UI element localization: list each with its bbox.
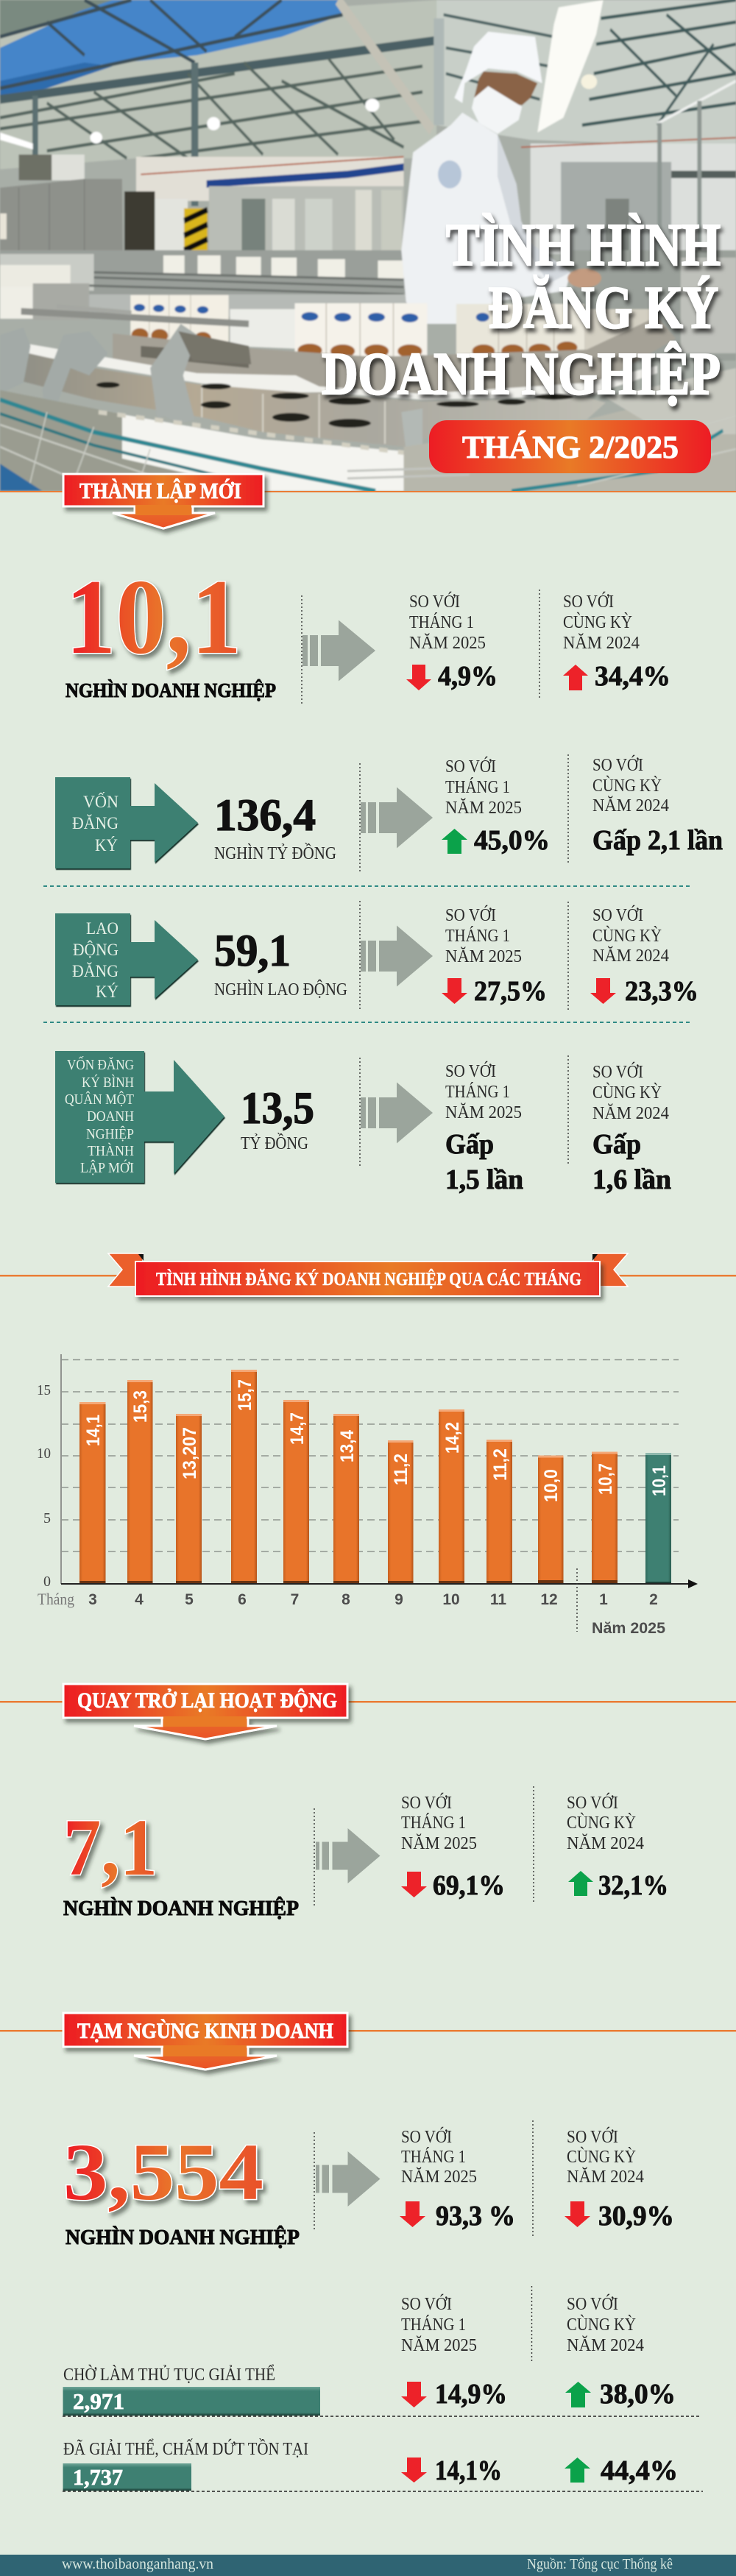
arrow: grey [361,1082,433,1144]
key figure: 3,554 [63,2127,300,2249]
bar chart: monthly new enterprises: 15 [37,1382,51,1398]
row: vốn đăng ký bình quân [55,1051,314,1183]
row: vốn đăng ký: KÝ [95,836,118,854]
bar value labels: 10,0 [541,1469,562,1502]
comparison: tháng 1: 27,5% [474,976,547,1007]
comparison: cùng kỳ: SO VỚI [592,905,643,925]
key figure: 3,554: NGHÌN DOANH NGHIỆP [66,2225,300,2249]
row: đã giải thể, chấm dứt tồn tại: 14,1% [435,2455,502,2486]
bar chart: monthly new enterprises: 10 [37,1446,51,1462]
comparison: tháng 1 năm 2025: THÁNG 1 [409,613,474,632]
comparison: tháng 1: 1,5 lần [445,1164,523,1195]
bar value labels: 11,2 [391,1454,411,1485]
key figure: 10,1: NGHÌN DOANH NGHIỆP [66,679,276,701]
comparison: cùng kỳ: NĂM 2024 [592,946,669,966]
bar value labels: 15,3 [130,1390,151,1423]
comparison: tháng 1 [442,905,547,1007]
comparison: cùng kỳ: SO VỚI [567,2127,618,2147]
comparison header: cùng kỳ: CÙNG KỲ [567,2315,636,2335]
comparison header: tháng 1 [401,2294,477,2355]
comparison: cùng kỳ: CÙNG KỲ [592,1083,662,1103]
comparison: cùng kỳ [592,1062,671,1195]
month labels: 2 [649,1591,658,1608]
comparison: tháng 1 năm 2025: NĂM 2025 [409,634,486,653]
row: lao động đăng ký: LAO [86,919,118,938]
key figure: 7,1: NGHÌN DOANH NGHIỆP [63,1896,299,1920]
row: chờ làm thủ tục giải thể: 14,9% [435,2379,507,2410]
bar value labels: 13,4 [337,1430,358,1462]
hero photo: factory worker and milk production line [0,0,736,500]
row: vốn đăng ký bình quân: THÀNH [88,1142,134,1159]
comparison: tháng 1: THÁNG 1 [445,927,510,946]
comparison: cùng kỳ: Gấp [592,1129,641,1160]
arrow: grey [361,926,433,986]
footer [0,2555,736,2576]
row: vốn đăng ký bình quân: KÝ BÌNH [82,1074,134,1091]
row: vốn đăng ký: ĐĂNG [72,814,118,832]
comparison header: cùng kỳ [567,2294,644,2355]
arrow: grey [316,1828,380,1883]
comparison: cùng kỳ: CÙNG KỲ [592,776,662,796]
month labels: 10 [442,1591,460,1608]
row: lao động đăng ký [55,913,347,1005]
ribbon heading: monthly chart: TÌNH HÌNH ĐĂNG KÝ DOANH NGHIỆP QUA CÁC THÁNG [156,1269,581,1289]
comparison: tháng 1 năm 2025: 4,9% [438,661,498,692]
comparison: tháng 1: THÁNG 1 [401,1814,466,1833]
comparison: tháng 1: NĂM 2025 [401,2168,477,2187]
key figure: 10,1: 10,1 [66,557,241,676]
comparison: cùng kỳ: NĂM 2024 [567,2168,644,2187]
row: vốn đăng ký [55,777,336,868]
row: vốn đăng ký: 136,4 [214,791,316,841]
row: lao động đăng ký: 59,1 [214,927,291,976]
comparison: cùng kỳ năm 2024 [563,592,670,692]
comparison: cùng kỳ năm 2024: SO VỚI [563,592,614,612]
row: lao động đăng ký: ĐỘNG [73,940,118,959]
comparison header: tháng 1: NĂM 2025 [401,2336,477,2355]
comparison: cùng kỳ: 30,9% [598,2201,674,2232]
comparison: cùng kỳ [590,905,698,1007]
comparison: cùng kỳ: NĂM 2024 [567,1834,644,1853]
comparison: tháng 1: 45,0% [474,825,550,856]
section badge: thành lập mới [63,474,263,528]
row: đã giải thể, chấm dứt tồn tại: 44,4% [601,2455,678,2486]
key figure: 7,1 [63,1802,299,1920]
comparison: tháng 1 [400,2127,515,2232]
date pill [429,420,711,473]
bar value labels: 15,7 [235,1379,255,1411]
comparison: tháng 1: SO VỚI [445,905,496,925]
hero bottom orange rule [0,491,736,492]
bar chart: monthly new enterprises: 0 [43,1574,51,1590]
bar value labels: 11,2 [490,1448,511,1481]
bar chart: monthly new enterprises: 5 [43,1510,51,1526]
comparison: tháng 1: 93,3 % [436,2201,515,2232]
month labels: 8 [342,1591,350,1608]
comparison: cùng kỳ: NĂM 2024 [592,1104,669,1123]
row: chờ làm thủ tục giải thể: 2,971 [73,2388,124,2414]
comparison: cùng kỳ năm 2024: 34,4% [595,661,670,692]
comparison: tháng 1: THÁNG 1 [445,1083,510,1102]
row: vốn đăng ký bình quân: 13,5 [241,1084,314,1133]
comparison: cùng kỳ: 32,1% [598,1870,668,1901]
arrow: grey [302,620,375,682]
row: đã giải thể, chấm dứt tồn tại: ĐÃ GIẢI THỂ, CHẤM DỨT TỒN TẠI [63,2439,308,2459]
row: vốn đăng ký: NGHÌN TỶ ĐỒNG [214,843,336,863]
comparison: tháng 1: THÁNG 1 [401,2148,466,2167]
row: vốn đăng ký bình quân: TỶ ĐỒNG [241,1133,308,1153]
bar value labels [83,1379,670,1502]
row: chờ làm thủ tục giải thể: 38,0% [600,2379,676,2410]
comparison: tháng 1: NĂM 2025 [445,947,522,966]
bar value labels: 10,7 [595,1463,616,1495]
bar value labels: 13,207 [180,1427,200,1479]
comparison: cùng kỳ: SO VỚI [567,1793,618,1813]
month labels: 3 [88,1591,97,1608]
comparison header: tháng 1: THÁNG 1 [401,2315,466,2335]
row: lao động đăng ký: ĐĂNG [72,962,118,980]
section badge: tạm ngừng kinh doanh: TẠM NGÙNG KINH DOANH [77,2019,333,2043]
comparison: cùng kỳ: SO VỚI [592,1062,643,1082]
month labels: 9 [394,1591,403,1608]
arrow: grey [316,2151,380,2207]
month labels: 6 [238,1591,247,1608]
x axis with arrow [61,1579,698,1588]
comparison header: tháng 1: SO VỚI [401,2294,452,2314]
bar value labels: 14,2 [442,1422,463,1454]
row: lao động đăng ký: NGHÌN LAO ĐỘNG [214,980,347,999]
row: vốn đăng ký bình quân: QUÂN MỘT [65,1090,134,1108]
row: vốn đăng ký bình quân: LẬP MỚI [80,1158,134,1176]
comparison: cùng kỳ: Gấp 2,1 lần [592,825,723,856]
comparison: cùng kỳ: CÙNG KỲ [567,1813,636,1833]
comparison: tháng 1: NĂM 2025 [401,1834,477,1853]
comparison: cùng kỳ: CÙNG KỲ [567,2147,636,2167]
month labels [38,1590,658,1608]
comparison: tháng 1 năm 2025: SO VỚI [409,592,460,612]
key figure: 7,1: 7,1 [63,1802,158,1892]
row: chờ làm thủ tục giải thể: CHỜ LÀM THỦ TỤC GIẢI THỂ [63,2365,275,2385]
row: vốn đăng ký bình quân: DOANH [87,1108,134,1125]
comparison: cùng kỳ: SO VỚI [592,755,643,775]
comparison: cùng kỳ [565,2127,674,2232]
section badge: thành lập mới: THÀNH LẬP MỚI [79,478,241,503]
year label: Năm 2025 [592,1620,665,1637]
title [322,211,721,407]
comparison: cùng kỳ: NĂM 2024 [592,796,669,815]
key figure: 3,554: 3,554 [63,2127,263,2217]
bars [79,1370,671,1585]
comparison: tháng 1 năm 2025 [406,592,498,692]
month labels: 12 [540,1591,558,1608]
comparison: cùng kỳ [567,1793,668,1901]
bar value labels: 10,1 [649,1465,670,1496]
comparison: tháng 1: SO VỚI [445,1061,496,1081]
row: vốn đăng ký bình quân: VỐN ĐĂNG [67,1055,134,1073]
comparison: tháng 1: SO VỚI [401,2127,452,2147]
comparison: tháng 1: 69,1% [433,1870,505,1901]
footer: www.thoibaonganhang.vn [62,2556,213,2572]
comparison: cùng kỳ năm 2024: NĂM 2024 [563,634,640,653]
row: vốn đăng ký bình quân: NGHIỆP [86,1125,134,1142]
month labels: 11 [490,1591,506,1608]
comparison header: cùng kỳ: SO VỚI [567,2294,618,2314]
row: chờ làm thủ tục giải thể [63,2365,676,2416]
section badge: quay trở lại hoạt động: QUAY TRỞ LẠI HOẠT ĐỘNG [77,1688,337,1713]
bar chart: monthly new enterprises [37,1354,698,1637]
comparison: tháng 1: Gấp [445,1129,494,1160]
comparison: tháng 1 [401,1793,505,1901]
bar value labels: 14,1 [83,1415,104,1446]
comparison: cùng kỳ [592,755,723,856]
row: vốn đăng ký: VỐN [83,792,118,811]
row: lao động đăng ký: KÝ [96,983,118,1001]
comparison: tháng 1 [442,757,550,856]
arrow: grey [361,788,433,848]
comparison: tháng 1: SO VỚI [401,1793,452,1813]
comparison: cùng kỳ: 1,6 lần [592,1164,671,1195]
comparison: tháng 1: THÁNG 1 [445,778,510,797]
comparison: tháng 1: NĂM 2025 [445,1103,522,1122]
month labels: 7 [291,1591,299,1608]
month labels: Tháng [38,1590,74,1608]
month labels: 5 [185,1591,194,1608]
comparison: tháng 1: SO VỚI [445,757,496,776]
section badge: tạm ngừng kinh doanh [63,2013,347,2070]
comparison: tháng 1: NĂM 2025 [445,799,522,818]
footer: Nguồn: Tổng cục Thống kê [527,2556,673,2572]
date pill: THÁNG 2/2025 [462,431,679,465]
comparison: cùng kỳ năm 2024: CÙNG KỲ [563,612,632,632]
month labels: 1 [599,1591,608,1608]
comparison: cùng kỳ: 23,3% [625,976,698,1007]
bar value labels: 14,7 [287,1412,308,1445]
section badge: quay trở lại hoạt động [63,1684,347,1739]
month labels: 4 [135,1591,144,1608]
row: đã giải thể, chấm dứt tồn tại [63,2439,678,2491]
comparison: tháng 1 [445,1061,523,1195]
ribbon heading: monthly chart [108,1253,628,1296]
row: đã giải thể, chấm dứt tồn tại: 1,737 [73,2464,123,2490]
comparison header: cùng kỳ: NĂM 2024 [567,2336,644,2355]
comparison: cùng kỳ: CÙNG KỲ [592,926,662,946]
